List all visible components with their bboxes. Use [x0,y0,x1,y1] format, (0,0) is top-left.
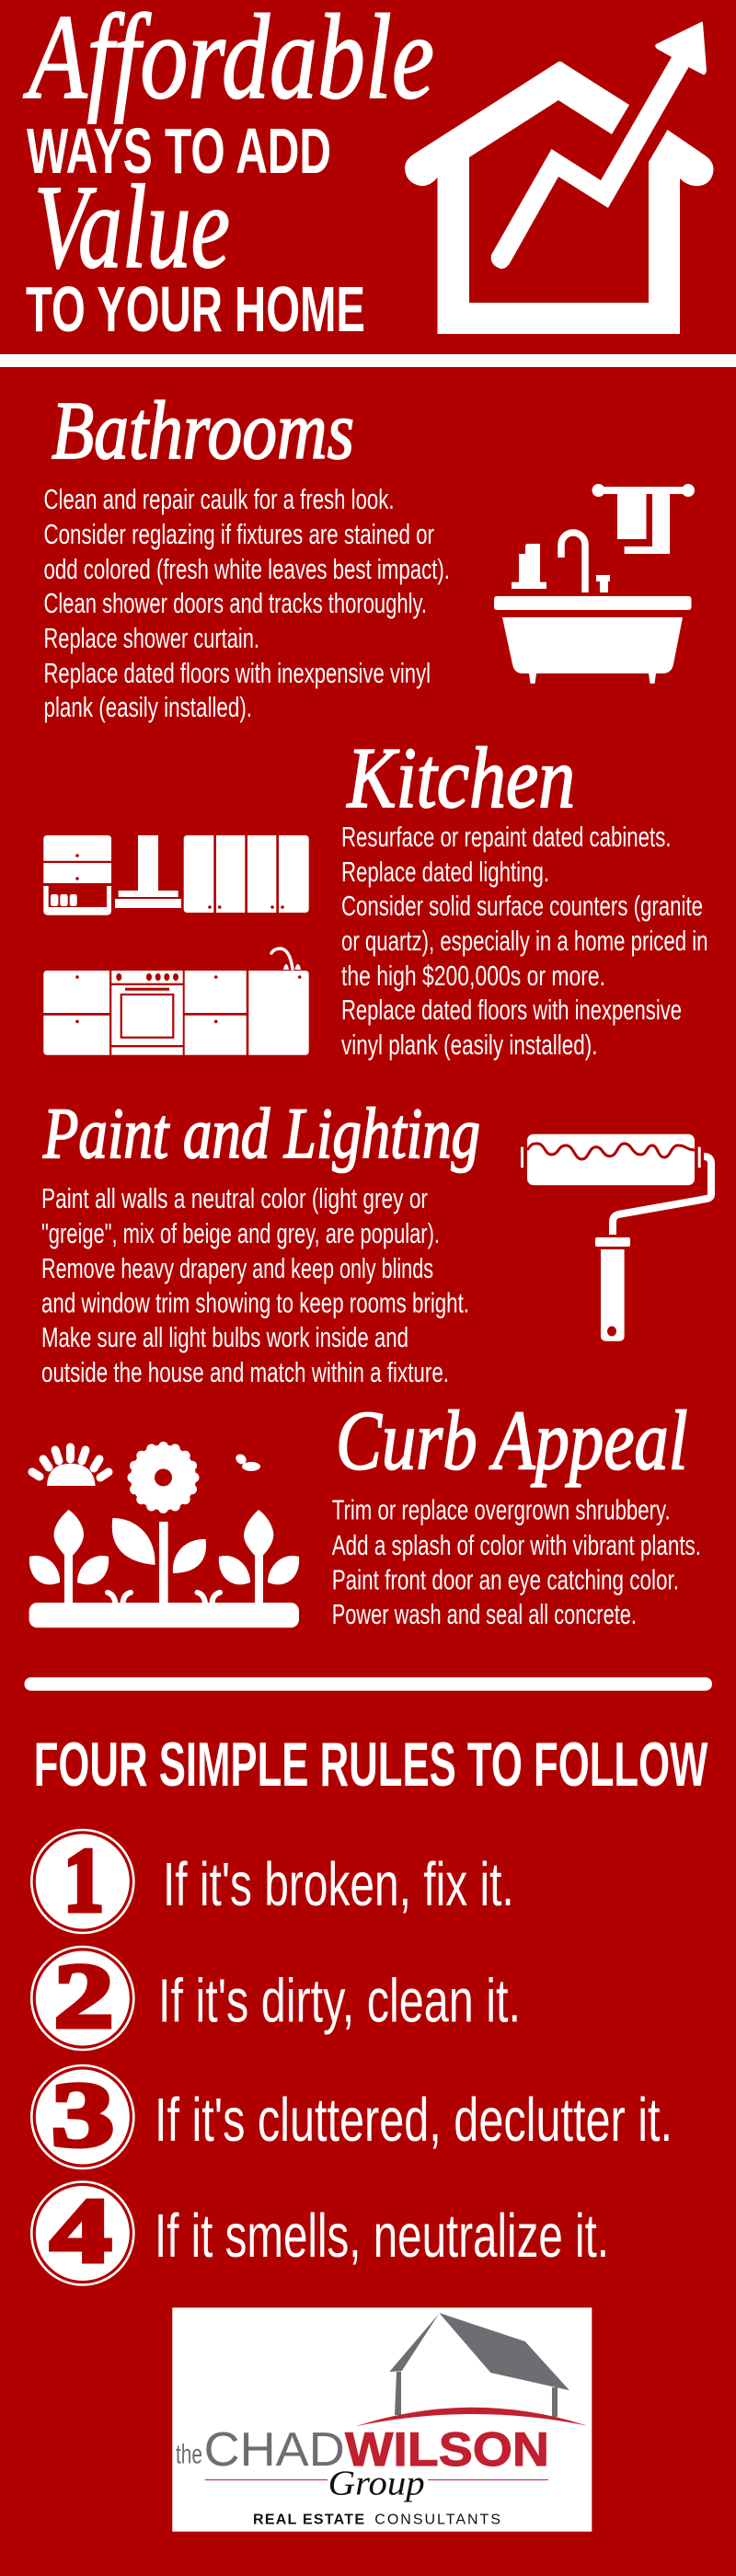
text block: paint and lighting tips: Make sure all light bulbs work inside and [41,1321,408,1353]
logo: The Chad Wilson Group: CHAD [204,2423,345,2477]
text block: bathrooms tips: Clean and repair caulk for a fresh look. [44,483,394,515]
heading: Kitchen: Kitchen [346,730,575,826]
icon: bathtub [494,484,695,684]
text block: bathrooms tips: plank (easily installed). [44,691,252,723]
text block: kitchen tips: Replace dated lighting. [341,856,549,888]
heading: Paint and Lighting: Paint and Lighting [42,1093,480,1173]
rule 3 [31,2064,673,2168]
title: WAYS TO ADD [27,115,331,187]
text block: paint and lighting tips: Paint all walls a neutral color (light grey or [41,1182,428,1214]
icon: garden with sun and flowers [29,1442,299,1627]
rule 1 [31,1829,514,1933]
title [23,0,434,345]
logo: The Chad Wilson Group: Group [328,2465,425,2503]
text block: paint and lighting tips: Remove heavy drapery and keep only blinds [41,1252,433,1284]
divider: top bar [0,354,736,367]
text block: paint and lighting tips: and window trim showing to keep rooms bright. [41,1286,469,1319]
text block: bathrooms tips: Replace dated floors with inexpensive vinyl [44,657,431,689]
icon: paint roller [521,1134,711,1341]
rule 2: If it's dirty, clean it. [158,1967,521,2035]
rule 4: 4 [51,2179,111,2282]
text block: paint and lighting tips: "greige", mix of beige and grey, are popular). [41,1217,440,1249]
title: Value [34,161,230,293]
rule 2 [31,1945,521,2050]
rule 4 [31,2179,609,2285]
rule 1: If it's broken, fix it. [163,1850,514,1919]
title: TO YOUR HOME [26,273,365,345]
logo: The Chad Wilson Group [172,2307,592,2532]
rule 1: 1 [63,1829,104,1931]
text block: kitchen tips: vinyl plank (easily installed). [341,1029,598,1061]
icon: upper kitchen cabinets and hood [43,835,309,915]
text block: bathrooms tips: odd colored (fresh white leaves best impact). [44,553,450,585]
text block: curb appeal tips [332,1494,701,1630]
icon: lower kitchen cabinets, stove and sink [43,949,309,1055]
text block: kitchen tips: the high $200,000s or more. [341,960,605,992]
rule 2: 2 [54,1945,114,2047]
text block: bathrooms tips: Clean shower doors and tracks thoroughly. [44,587,427,619]
text block: bathrooms tips [44,483,450,723]
logo: The Chad Wilson Group: CONSULTANTS [374,2512,500,2527]
logo: The Chad Wilson Group: REAL ESTATE [253,2512,364,2527]
icon: house with rising arrow [405,22,714,334]
text block: paint and lighting tips [41,1182,469,1388]
heading: Bathrooms: Bathrooms [52,385,354,477]
logo: The Chad Wilson Group: WILSON [345,2423,549,2477]
text block: bathrooms tips: Consider reglazing if fixtures are stained or [44,518,434,550]
text block: paint and lighting tips: outside the house and match within a fixture. [41,1356,449,1388]
rule 3: 3 [52,2064,114,2166]
text block: kitchen tips [341,821,708,1061]
logo: The Chad Wilson Group: the [176,2439,202,2469]
text block: bathrooms tips: Replace shower curtain. [44,622,259,654]
divider: middle bar [24,1677,712,1691]
